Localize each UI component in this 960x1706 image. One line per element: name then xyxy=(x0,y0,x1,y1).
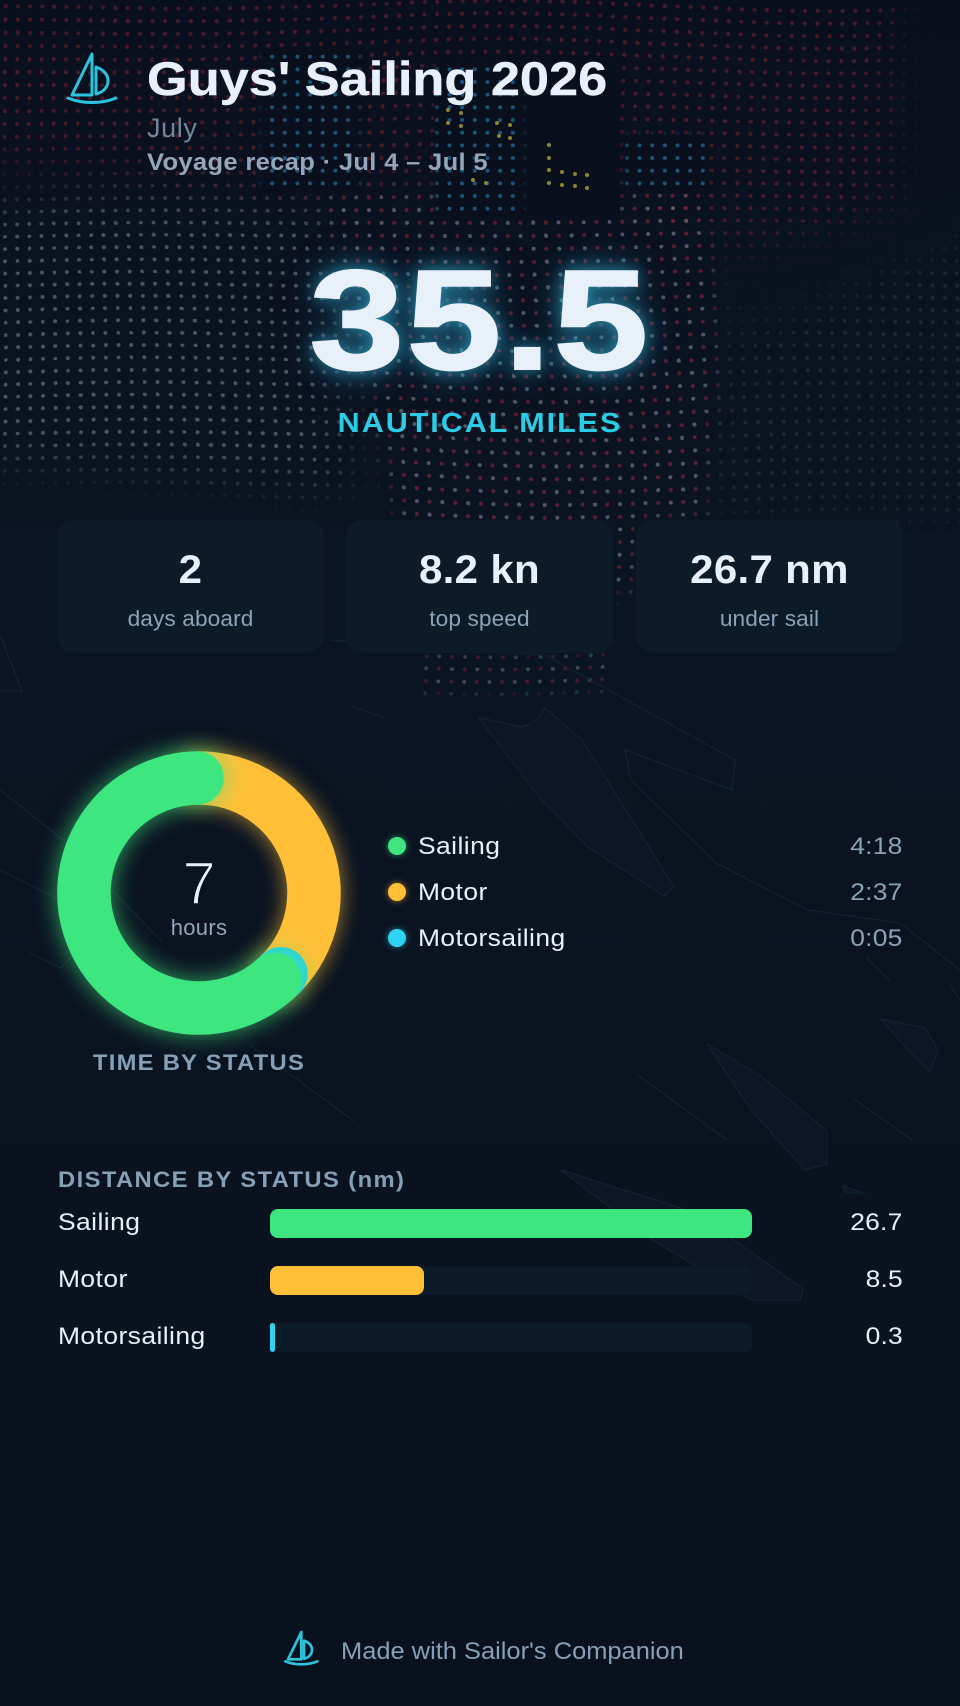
bar label: Sailing xyxy=(58,1209,140,1236)
title: Guys' Sailing 2026 xyxy=(147,52,607,105)
legend dot xyxy=(388,929,406,947)
stat value: 8.2 kn xyxy=(419,548,540,592)
hero unit label: NAUTICAL MILES xyxy=(338,407,622,438)
stat card: days aboard xyxy=(57,520,324,653)
legend row: sailing xyxy=(384,833,903,860)
bar chart: distance by status xyxy=(58,1209,903,1352)
arc: motorsailing xyxy=(275,974,281,980)
bar label: Motorsailing xyxy=(58,1323,206,1350)
arc: sailing xyxy=(84,778,275,1008)
stat value: 26.7 nm xyxy=(690,548,849,592)
bar value: 0.3 xyxy=(866,1323,903,1350)
background: dotted world map and faint chart outlines xyxy=(0,0,960,1300)
header logo: sailboat icon xyxy=(66,52,118,104)
bar value: 8.5 xyxy=(866,1266,903,1293)
legend dot xyxy=(388,883,406,901)
bar value: 26.7 xyxy=(851,1209,903,1236)
bar row: motorsailing xyxy=(58,1323,903,1352)
subtitle: month: July xyxy=(147,113,197,143)
stat value: 2 xyxy=(179,548,202,592)
legend value: 4:18 xyxy=(851,833,903,860)
bar track and fill xyxy=(270,1323,752,1352)
bar track and fill xyxy=(270,1266,752,1295)
stat card: under sail xyxy=(636,520,903,653)
stat label: top speed xyxy=(429,606,530,631)
stat label: under sail xyxy=(720,606,819,631)
donut centre value: 7 xyxy=(182,850,216,917)
legend dot xyxy=(388,837,406,855)
donut centre unit: hours xyxy=(171,915,227,940)
legend label: Sailing xyxy=(418,833,500,860)
subtitle: voyage dates: Voyage recap · Jul 4 – Jul 5 xyxy=(147,149,488,176)
arc: motor xyxy=(199,778,314,974)
bar row: motor xyxy=(58,1266,903,1295)
legend row: motor xyxy=(384,878,903,906)
hero number: nautical miles: 35.5 xyxy=(309,241,651,400)
bar row: sailing xyxy=(58,1209,903,1238)
stat card: top speed xyxy=(346,520,613,653)
legend value: 2:37 xyxy=(851,879,903,906)
stat label: days aboard xyxy=(128,606,253,631)
legend label: Motor xyxy=(418,879,488,906)
legend: time by status xyxy=(384,833,903,952)
bar label: Motor xyxy=(58,1266,128,1293)
footer logo: sailboat icon xyxy=(284,1630,319,1666)
bar track and fill xyxy=(270,1209,752,1238)
heading: distance by status: DISTANCE BY STATUS (nm) xyxy=(58,1167,405,1192)
donut caption: TIME BY STATUS xyxy=(93,1050,305,1075)
legend value: 0:05 xyxy=(851,925,903,952)
footer credit: Made with Sailor's Companion xyxy=(341,1638,684,1665)
donut chart: time by status xyxy=(40,733,356,1052)
legend row: motorsailing xyxy=(384,925,903,952)
legend label: Motorsailing xyxy=(418,925,566,952)
